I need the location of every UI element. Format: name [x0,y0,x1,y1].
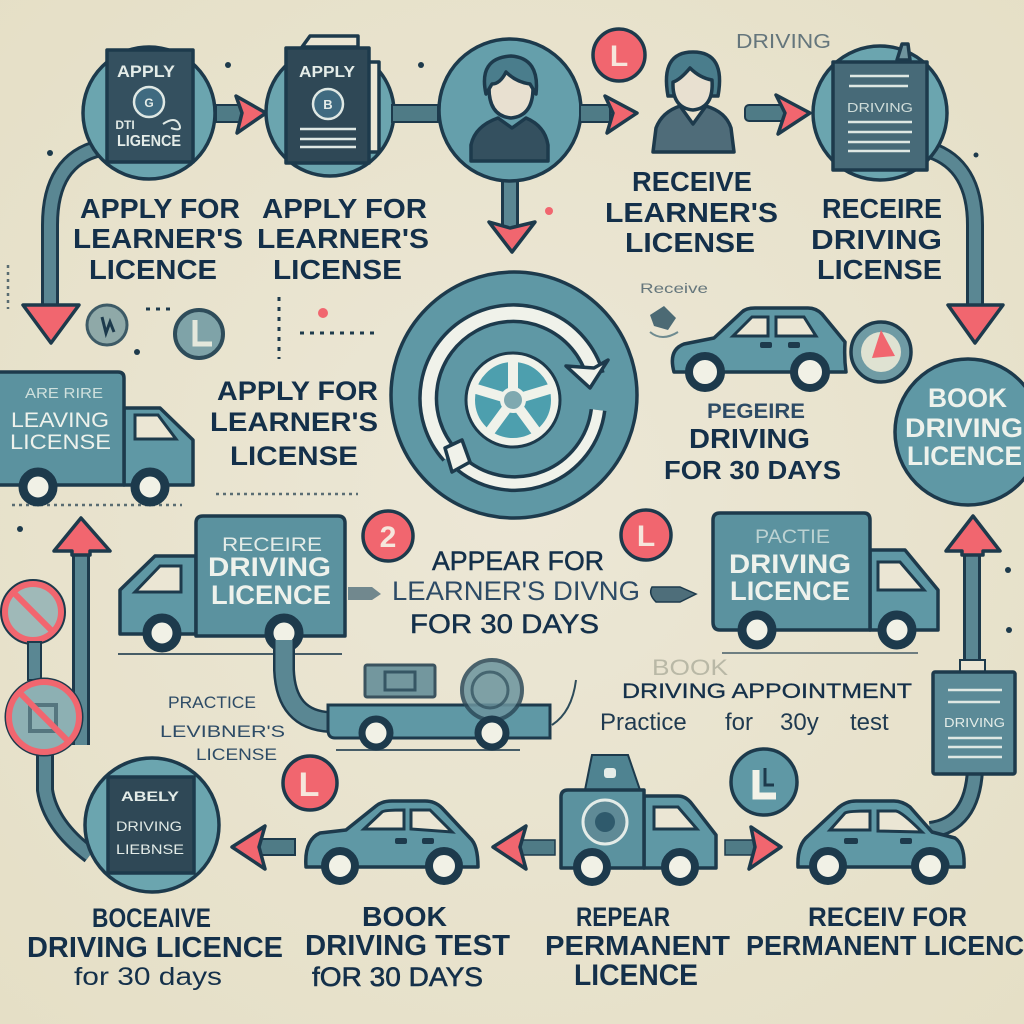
sign: prohibition upper [3,582,63,642]
circle: book driving licence [895,359,1024,505]
heading: repear permanent licence: PERMANENT [545,930,730,961]
heading: appear for learner's diving: FOR 30 DAYS [410,609,599,639]
heading: appear for learner's license: APPLY FOR [217,376,378,406]
centre: wheel with cycle arrow [391,272,637,518]
badge: L plate lower: L [299,766,319,804]
badge: number 2: 2 [380,521,396,554]
step 3: person in circle [439,39,581,181]
tow truck: flatbed with tyre [284,640,576,751]
text: book driving appointment: BOOK [652,655,728,680]
heading: book driving test for 30 days: DRIVING TEST [305,930,510,962]
step 5: document in circle [813,44,947,180]
truck: receire driving licence: RECEIRE [222,535,322,556]
connector: central down arrow [489,180,535,252]
truck: leaving licence: LICENSE [10,431,111,454]
heading: book driving test for 30 days: BOOK [362,901,447,932]
text: book driving appointment: for [725,709,753,736]
step 1: apply document in circle: DTI [115,118,135,132]
step 2: apply folder in circle: B [323,97,333,112]
text: practice learner's license: LICENSE [196,745,277,764]
arrow: small right [651,587,696,602]
truck: practice driving licence [713,513,938,654]
connector: top-right curved arrow [930,150,1003,343]
heading: apply for learner's license [257,193,429,285]
text: practice learner's license: LEVIBNER'S [160,722,285,741]
heading: receire driving license: RECEIRE [822,193,942,224]
badge: L plate [593,29,645,81]
icon: clock upper right [851,322,911,382]
step 2: apply folder in circle [266,36,394,176]
heading: book driving test for 30 days [305,901,510,992]
text: practice learner's license [160,693,285,764]
post between signs [28,642,41,680]
circle: book driving licence: LICENCE [907,441,1022,471]
dot: pink marker right [545,207,553,215]
heading: apply for learner's licence [73,193,243,285]
connector: left up arrow [54,518,110,745]
heading: driving for 30 days: FOR 30 DAYS [664,455,841,485]
small icon: left clock [175,310,223,358]
heading: receive driving licence for 30 days: BOCEAIVE [92,903,211,933]
truck: practice driving licence: PACTIE [755,527,830,548]
step 1: apply document in circle [83,47,215,179]
heading: receive learner's license [605,166,778,258]
connector: right up arrow [946,516,1000,665]
arrow: van to car [493,826,555,869]
step 1: apply document in circle: G [144,96,154,110]
connector: top-left curved arrow [23,148,100,343]
badge: L plate centre [621,510,671,560]
heading: book driving test for 30 days: fOR 30 DAYS [312,962,483,992]
heading: appear for learner's license: LICENSE [230,441,358,471]
text: book driving appointment: DRIVING APPOINTMENT [622,680,912,703]
heading: receive learner's license: RECEIVE [632,166,752,197]
arrow: van to car right [725,827,781,869]
circle: book driving licence: BOOK [928,383,1007,413]
badge: L plate lower [283,756,337,810]
truck: leaving licence [0,372,193,502]
text: book driving appointment: Practice [600,709,687,736]
dot: pink marker [318,308,328,318]
heading: apply for learner's license: LEARNER'S [257,223,429,254]
heading: appear for learner's diving: APPEAR FOR [432,546,604,576]
connector: bottom-left curve [45,755,90,855]
small icon: gray seal [650,306,678,337]
connector: step 2 to 3 [392,105,438,122]
text: book driving appointment: 30y [780,709,819,736]
heading: receive learner's license: LICENSE [625,227,755,258]
heading: apply for learner's licence: LICENCE [89,254,217,285]
heading: appear for learner's license: LEARNER'S [210,407,378,437]
badge: L plate centre: L [637,520,655,553]
truck: receire driving licence: DRIVING [208,552,331,582]
icon: clock L badge [731,749,797,815]
heading: appear for learner's diving [392,546,640,639]
step: bottom-left document in circle [85,758,219,892]
document: driving [933,660,1015,774]
step 2: apply folder in circle: APPLY [299,64,355,81]
heading: driving for 30 days: PEGEIRE [707,400,805,423]
text: book driving appointment [600,655,912,736]
car: bottom left [306,801,478,881]
heading: apply for learner's license: LICENSE [273,254,402,285]
truck: practice driving licence: DRIVING [729,549,851,579]
step: bottom-left document in circle: DRIVING [116,818,182,834]
heading: repear permanent licence: LICENCE [574,959,698,992]
heading: receive driving licence for 30 days [27,903,283,991]
heading: receire driving license: LICENSE [817,254,942,285]
heading: receire driving license: DRIVING [811,224,942,255]
truck: leaving licence: ARE RIRE [25,385,103,402]
arrow: step 4 to 5 [745,95,810,134]
heading: driving for 30 days [664,400,841,485]
sign: prohibition lower [7,680,81,754]
heading: apply for learner's license: APPLY FOR [262,193,427,224]
step 1: apply document in circle: APPLY [117,62,176,81]
heading: receive driving licence for 30 days: DRIVING LICENCE [27,932,283,964]
heading: appear for learner's license [210,376,378,471]
arrow: to bottom-left circle [232,826,295,869]
truck: receire driving licence [118,516,345,655]
truck: receire driving licence: LICENCE [211,580,331,610]
heading: receive learner's license: LEARNER'S [605,197,778,228]
label: driving: DRIVING [736,31,831,53]
arrow: step 1 to 2 [216,96,266,133]
heading: repear permanent licence [545,902,730,992]
heading: receive for permanent licence: RECEIV FOR [808,902,967,932]
heading: repear permanent licence: REPEAR [576,902,670,932]
label: receive small: Receive [640,280,708,296]
arrow: step 3 to 4 [580,96,637,133]
heading: apply for learner's licence: LEARNER'S [73,223,243,254]
truck: practice driving licence: LICENCE [730,576,850,606]
truck: leaving licence: LEAVING [11,409,109,432]
step: bottom-left document in circle: LIEBNSE [116,841,184,857]
van: with emblem [561,755,716,882]
step 1: apply document in circle: LIGENCE [117,133,181,150]
car: upper right [672,308,846,388]
heading: driving for 30 days: DRIVING [689,423,810,454]
decorative dots [8,62,1012,633]
heading: receive for permanent licence [746,902,1024,961]
text: book driving appointment: test [850,709,889,736]
step 5: document in circle: DRIVING [847,100,913,115]
heading: receive driving licence for 30 days: for 30 days [74,963,222,991]
badge: number 2 [363,511,413,561]
connector: bottom-right curve [930,770,975,830]
small icon: left seal [87,305,127,345]
step: bottom-left document in circle: ABELY [121,788,180,804]
arrow: small left [348,587,381,600]
car: bottom right [798,801,964,881]
circle: book driving licence: DRIVING [905,413,1023,443]
heading: receire driving license [811,193,942,285]
heading: apply for learner's licence: APPLY FOR [80,193,240,224]
document: driving: DRIVING [944,715,1005,730]
heading: appear for learner's diving: LEARNER'S DIVNG [392,576,640,606]
step 4: person [653,52,734,152]
text: practice learner's license: PRACTICE [168,693,256,712]
badge: L plate: L [610,40,628,73]
